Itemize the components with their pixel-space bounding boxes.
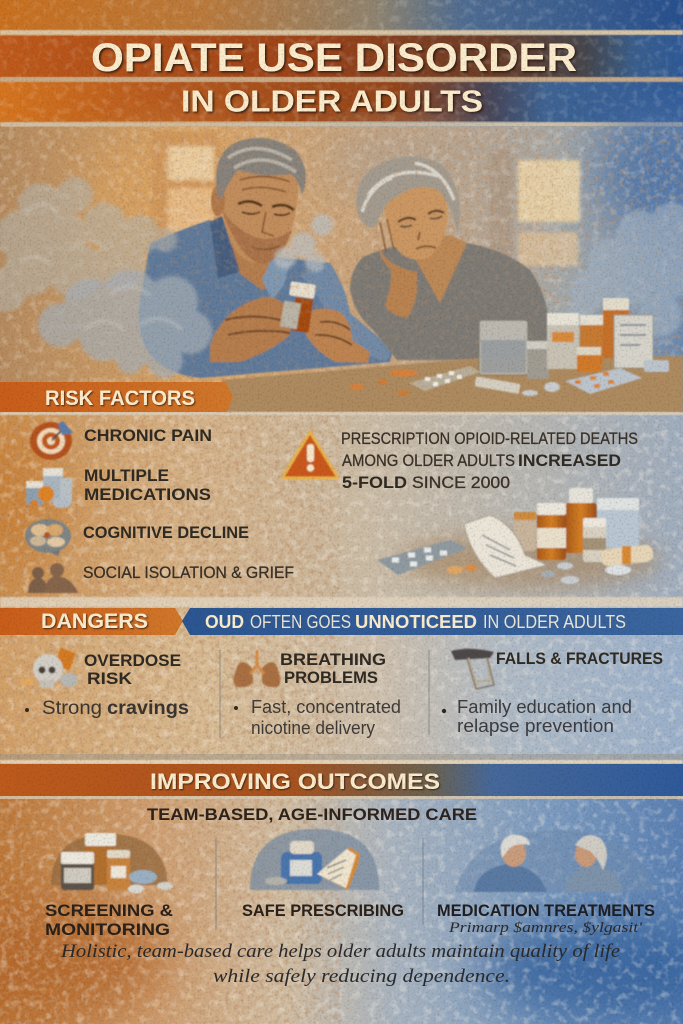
heading: risk factors (0, 382, 233, 412)
closing statement: Holistic, team-based care helps older adults maintain quality of life (60, 941, 620, 962)
statistic callout: PRESCRIPTION OPIOID-RELATED DEATHS (341, 429, 638, 448)
label: screening and monitoring: SCREENING & (45, 901, 173, 920)
icon: screening bottles (51, 833, 173, 894)
icon: safe prescribing (250, 829, 379, 890)
panel: dangers (20, 648, 663, 738)
text: strong cravings: cravings (107, 697, 189, 719)
text: strong cravings (25, 697, 189, 719)
medication bottles and water glass on table (350, 298, 669, 396)
risk: multiple medications: MULTIPLE (84, 466, 169, 485)
danger: falls and fractures: FALLS & FRACTURES (496, 649, 663, 668)
banner: dangers: OFTEN GOES (250, 612, 351, 632)
statistic callout (341, 429, 638, 492)
label: safe prescribing: SAFE PRESCRIBING (242, 901, 404, 920)
risk: cognitive decline: COGNITIVE DECLINE (83, 523, 249, 542)
label: screening and monitoring (45, 901, 173, 939)
left smoke cloud (0, 177, 333, 378)
table top (222, 356, 683, 412)
man (139, 138, 393, 378)
icon: skull with pills (20, 648, 78, 688)
closing statement: while safely reducing dependence. (213, 966, 510, 987)
risk: social isolation and grief: SOCIAL ISOLATION & GRIEF (83, 563, 294, 582)
text: nicotine delivery: Fast, concentrated (251, 697, 401, 717)
risk: chronic pain: CHRONIC PAIN (84, 426, 212, 445)
risk: multiple medications: MEDICATIONS (84, 485, 211, 504)
banner: dangers (0, 608, 683, 635)
statistic callout: AMONG OLDER ADULTS (342, 451, 515, 470)
woman (350, 156, 553, 360)
hero illustration: older couple with medications (0, 110, 683, 412)
icon: target (30, 421, 73, 460)
banner: dangers: UNNOTICEED (355, 612, 477, 632)
medications and prescription still life (377, 488, 660, 588)
right smoke cloud (564, 203, 683, 337)
divider band (0, 597, 683, 607)
subheading: TEAM-BASED, AGE-INFORMED CARE (147, 805, 477, 824)
title line 1: OPIATE USE DISORDER (91, 36, 577, 80)
text: family education (442, 697, 632, 736)
danger: overdose risk (84, 651, 181, 688)
page background (0, 412, 683, 1024)
text: family education: Family education and (457, 697, 632, 717)
panel: risk factors (0, 382, 683, 593)
statistic callout: 5-FOLD (342, 473, 407, 492)
icon: medication bottles (26, 468, 72, 508)
icon: older couple talking (455, 830, 655, 892)
danger: breathing problems: BREATHING (280, 650, 386, 669)
icon: lungs (233, 650, 280, 687)
risk: multiple medications (84, 466, 211, 504)
title banner (0, 0, 683, 127)
banner: dangers: OUD (205, 612, 244, 632)
text: strong cravings: Strong (42, 697, 102, 719)
text: nicotine delivery: nicotine delivery (251, 718, 375, 738)
text: family education: relapse prevention (457, 716, 614, 736)
text: nicotine delivery (234, 697, 401, 738)
danger: breathing problems (280, 650, 386, 687)
heading: risk factors: RISK FACTORS (45, 387, 195, 410)
statistic callout: SINCE 2000 (412, 473, 510, 492)
statistic callout: INCREASED (518, 451, 621, 470)
banner: improving outcomes (0, 754, 683, 799)
danger: overdose risk: OVERDOSE (84, 651, 181, 670)
icon: walker (451, 649, 494, 689)
title line 2: IN OLDER ADULTS (181, 84, 483, 118)
sublabel: treatment list: Primarp $amnres, $ylgasit' (448, 920, 643, 936)
danger: breathing problems: PROBLEMS (284, 668, 378, 687)
danger: overdose risk: RISK (87, 669, 133, 688)
background windows (152, 133, 580, 270)
label: screening and monitoring: MONITORING (45, 920, 170, 939)
closing statement (60, 941, 620, 987)
banner: improving outcomes: IMPROVING OUTCOMES (150, 769, 440, 794)
banner: dangers: IN OLDER ADULTS (483, 612, 626, 632)
banner: dangers: DANGERS (41, 610, 148, 633)
icon: brain (25, 519, 71, 556)
label: medication treatments: MEDICATION TREATMENTS (437, 901, 655, 920)
icon: isolated people (28, 563, 78, 593)
icon: warning triangle (283, 432, 337, 478)
man's hands and bottle (210, 297, 290, 362)
panel: improving outcomes (45, 805, 655, 987)
